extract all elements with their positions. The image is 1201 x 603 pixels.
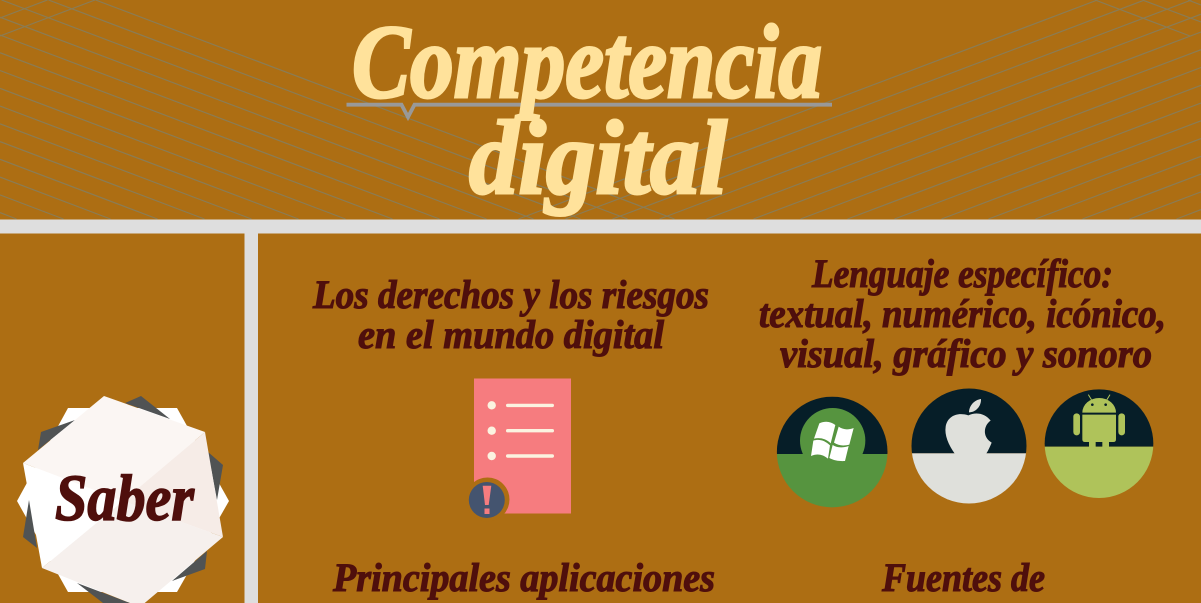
heading: lenguaje especifico: textual, numérico, icónico, [759,291,1166,336]
heading: lenguaje especifico: visual, gráfico y sonoro [780,331,1152,376]
icon: android [1043,388,1155,500]
heading: derechos y riesgos: en el mundo digital [358,312,665,357]
icons: operating systems [777,387,1155,509]
icon: apple [910,387,1028,505]
heading: derechos y riesgos: Los derechos y los riesgos [312,272,709,317]
grid bars [0,220,1201,603]
badge: Saber [17,396,229,603]
heading: fuentes de: Fuentes de [881,555,1045,600]
title: Competencia [352,3,822,120]
icon: document with alert [466,378,571,522]
title [352,3,822,216]
badge: Saber: Saber [55,462,195,535]
heading: principales aplicaciones: Principales aplicaciones [332,555,715,600]
heading: lenguaje especifico [759,251,1166,376]
title underline with speech notch [346,105,832,117]
title: digital [469,99,728,216]
icon: windows [777,397,888,509]
heading: lenguaje especifico: Lenguaje específico: [811,251,1113,296]
heading: derechos y riesgos [312,272,709,357]
